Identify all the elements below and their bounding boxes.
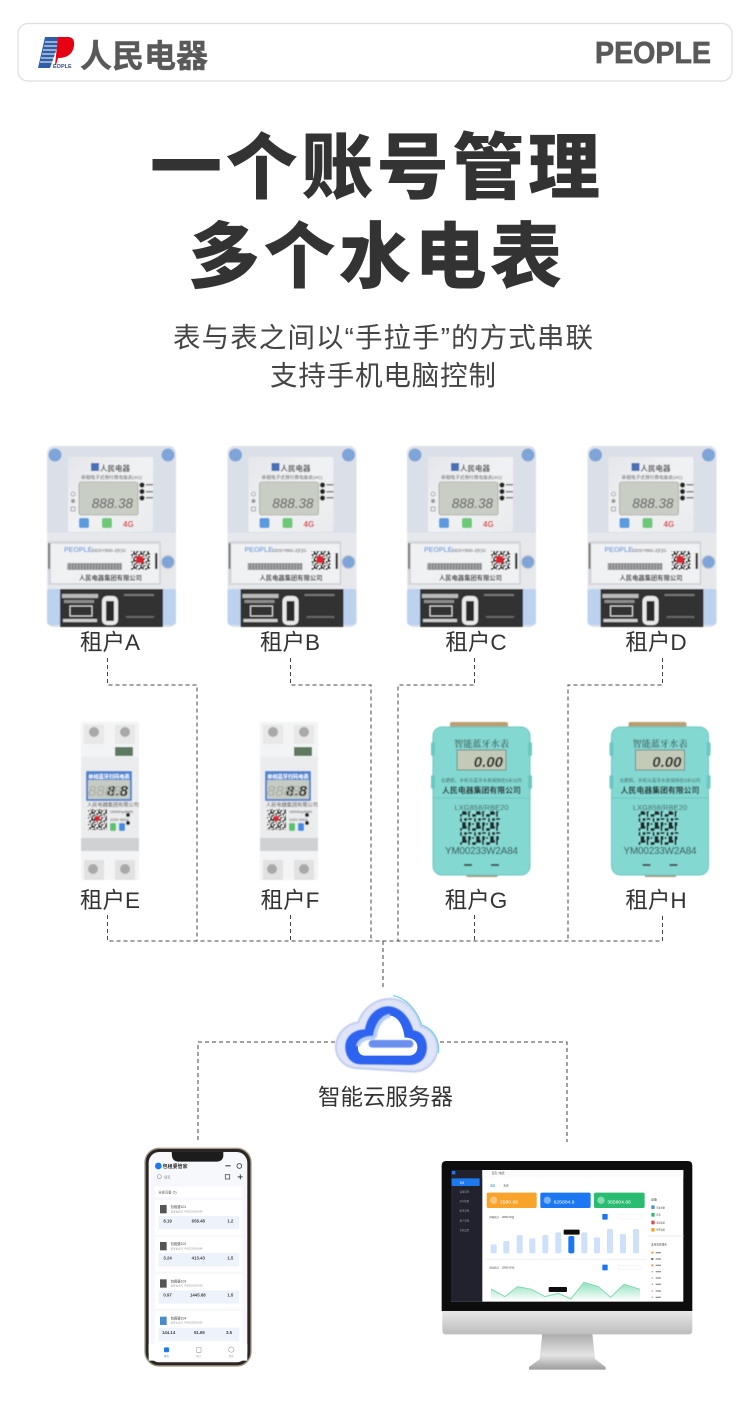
meter: tenant D: PEOPLE (604, 547, 633, 554)
label: tenant F: 租户F (261, 888, 319, 913)
meter: tenant D: 人民电器集团有限公司 (620, 573, 682, 582)
meter: tenant B: 888.38 (272, 496, 314, 511)
water meter: tenant H: 化肥机、手机与蓝牙水表保持在5米以内 (620, 777, 701, 784)
sidebar (451, 1170, 482, 1302)
meter: tenant D (588, 446, 716, 627)
meter: tenant C: PEOPLE (424, 547, 453, 554)
meter: tenant A: 单相电子式预付费电能表(4G) (81, 474, 142, 481)
device card 1: 8.19 (163, 1218, 172, 1223)
din meter: tenant F: 8888 (267, 783, 301, 800)
label: tenant D: 租户D (625, 630, 687, 655)
brand wordmark: PEOPLE (595, 35, 711, 70)
device card 4: 包租婆104 (171, 1315, 186, 1320)
label: tenant E: 租户E (80, 888, 140, 913)
din meter: tenant F: 单相蓝牙扫码电表 (267, 772, 310, 780)
din meter: tenant E: 1600imp/kWh (110, 810, 133, 814)
label: tenant H: 租户H (625, 888, 687, 913)
din meter: tenant F (260, 722, 318, 880)
meter: tenant D: 单相电子式预付费电能表(4G) (622, 474, 683, 481)
legend panel: 预警设备 (656, 1228, 666, 1232)
device card 1: 658.48 (192, 1218, 205, 1223)
bar chart (485, 1214, 647, 1260)
label: tenant G: 租户G (445, 888, 507, 913)
desktop monitor dashboard (442, 1161, 692, 1370)
meter: tenant B: 单相电子式预付费电能表(4G) (262, 474, 323, 481)
subtitle: 支持手机电脑控制 (270, 360, 496, 391)
water meter: tenant G: 0.00 (474, 754, 504, 771)
device card 3: 0.97 (163, 1293, 172, 1298)
icon: People logo (38, 37, 74, 70)
din meter: tenant F: 8.8 (286, 783, 308, 800)
app header (155, 1163, 243, 1197)
device card 4: 3.5 (226, 1330, 233, 1335)
din meter: tenant F: 220V 50Hz (289, 818, 308, 822)
legend panel: 设备 (651, 1196, 657, 1201)
brand name: 人民电器 (80, 38, 208, 74)
legend panel (648, 1196, 683, 1298)
device card 1: 1.2 (227, 1218, 234, 1223)
meter: tenant B: PEOPLE (244, 547, 273, 554)
stat card: blue: 625804.8 (554, 1200, 575, 1206)
legend panel: 在线 (656, 1213, 661, 1217)
meter: tenant A: 人民电器 (100, 463, 130, 473)
stat card: orange (487, 1193, 537, 1208)
meter: tenant B (228, 446, 356, 627)
label: tenant B: 租户B (260, 630, 320, 655)
device card 1: 蓝牙电表号 YM00233W2A84 (171, 1209, 203, 1213)
icon: People logo: EOPLE (53, 64, 72, 70)
water meter: tenant G (431, 722, 532, 877)
water meter: tenant G: 智能蓝牙水表 (454, 738, 509, 749)
bottom tab bar: 我的 (229, 1354, 234, 1358)
subtitle: 表与表之间以“手拉手”的方式串联 (173, 322, 593, 353)
device card 1: 包租婆101 (171, 1204, 186, 1209)
app header: 全部设备 (6) (158, 1189, 177, 1194)
bottom tab bar: 首页 (164, 1354, 169, 1358)
water meter: tenant G: 化肥机、手机与蓝牙水表保持在5米以内 (441, 777, 522, 784)
device card 4: 144.14 (162, 1330, 176, 1335)
desktop monitor dashboard: 首页 / 电表 (492, 1171, 505, 1175)
din meter: tenant E: 人民电器集团有限公司 (87, 800, 139, 808)
sidebar: 首页 (460, 1180, 465, 1184)
meter: tenant A: 4G (123, 520, 134, 529)
sidebar: 系统设置 (460, 1228, 470, 1232)
meter: tenant C: 单相电子式预付费电能表(4G) (441, 474, 502, 481)
stat card: orange: 2580.06 (500, 1200, 518, 1206)
legend panel: 本月充值排名 (651, 1243, 667, 1247)
meter: tenant C: 人民电器集团有限公司 (439, 573, 502, 582)
monitor stand (529, 1333, 606, 1370)
meter: tenant C: 888.38 (452, 496, 493, 511)
device card 4 (155, 1311, 242, 1344)
meter: tenant D: 888.38 (632, 496, 674, 511)
meter: tenant B: 4G (304, 520, 314, 529)
meter: tenant A (47, 446, 176, 627)
meter: tenant D: 4G (664, 520, 674, 529)
water meter: tenant H: 智能蓝牙水表 (632, 738, 688, 749)
stat card: green: 365804.86 (607, 1200, 631, 1206)
sidebar: 账单管理 (460, 1209, 470, 1213)
icon: cloud server (336, 996, 439, 1072)
meter: tenant C: 4G (483, 520, 494, 529)
device card 3: 1.5 (227, 1293, 234, 1298)
water meter: tenant H (610, 722, 710, 877)
desktop monitor dashboard: 水表 (503, 1184, 509, 1188)
meter: tenant C (407, 446, 536, 627)
label: tenant C: 租户C (445, 630, 507, 655)
meter: tenant D: 人民电器 (640, 463, 671, 473)
device card 4: 蓝牙水表号 YM00233W2A84 (171, 1321, 203, 1325)
line chart: 用水统计 · 10890.00吨 (489, 1266, 515, 1270)
desktop monitor dashboard: 电表 (490, 1184, 496, 1188)
stat card: green (594, 1193, 645, 1208)
device card 2: 413.43 (192, 1255, 205, 1260)
meter: tenant A: 人民电器集团有限公司 (79, 573, 142, 582)
device card 4: 51.65 (194, 1330, 205, 1335)
device card 3: 包租婆103 (171, 1278, 186, 1283)
title: 多个水电表 (188, 218, 562, 298)
din meter: tenant F: 人民电器集团有限公司 (266, 800, 318, 808)
device card 1 (155, 1200, 242, 1235)
device card 2: 1.5 (227, 1255, 234, 1260)
din meter: tenant E: 单相蓝牙扫码电表 (88, 772, 131, 780)
water meter: tenant H: 人民电器集团有限公司 (621, 785, 700, 795)
device card 2 (155, 1237, 242, 1272)
label: cloud server: 智能云服务器 (318, 1085, 453, 1110)
din meter: tenant F: 1600imp/kWh (289, 810, 312, 814)
phone app (145, 1148, 251, 1366)
legend panel: 电表总数 (656, 1205, 666, 1209)
water meter: tenant H: 0.00 (652, 754, 682, 771)
device card 2: 包租婆102 (171, 1241, 186, 1246)
connection lines (108, 658, 662, 1142)
din meter: tenant E (81, 722, 139, 880)
din meter: tenant E: 8.8 (107, 783, 129, 800)
sidebar: 租户管理 (460, 1218, 470, 1222)
water meter: tenant H: YM00233W2A84 (624, 846, 697, 857)
bottom tab bar: 统计 (196, 1354, 202, 1358)
sidebar: 设备管理 (460, 1190, 470, 1194)
legend panel: 离线设备 (656, 1220, 666, 1224)
meter: tenant C: 人民电器 (460, 463, 490, 473)
subtitle (173, 322, 593, 391)
meter: tenant B: 人民电器集团有限公司 (260, 573, 322, 582)
din meter: tenant E: 8888 (88, 783, 122, 800)
device card 2: 3.24 (163, 1255, 172, 1260)
device card 2: 蓝牙电表号 YM00233W2A84 (171, 1246, 203, 1250)
sidebar: 房间管理 (460, 1199, 470, 1203)
water meter: tenant G: LXG858/RBE20 (454, 803, 508, 812)
app header: 搜索 (164, 1174, 171, 1179)
water meter: tenant G: 人民电器集团有限公司 (442, 785, 521, 795)
title: 一个账号管理 (150, 129, 600, 209)
din meter: tenant E: 220V 50Hz (110, 818, 129, 822)
meter: tenant A: 888.38 (92, 496, 133, 511)
meter: tenant A: DDSY850-J(E)G (92, 548, 126, 553)
device card 3: 蓝牙电表号 YM00233W2A84 (171, 1284, 203, 1288)
meter: tenant D: DDSY850-J(E)G (632, 548, 667, 553)
water meter: tenant G: YM00233W2A84 (445, 846, 519, 857)
app header: 包租婆管家 (163, 1163, 188, 1170)
stat card: blue (540, 1193, 591, 1208)
bar chart: 用电统计 · 10890.00度 (489, 1215, 515, 1219)
device card 3 (155, 1274, 242, 1309)
meter: tenant B: 人民电器 (280, 463, 311, 473)
meter: tenant C: DDSY850-J(E)G (452, 548, 486, 553)
title (150, 129, 600, 298)
line chart (489, 1265, 641, 1301)
bottom tab bar (149, 1344, 247, 1361)
label: tenant A: 租户A (80, 630, 140, 655)
device card 3: 1445.68 (190, 1293, 206, 1298)
water meter: tenant H: LXG858/RBE20 (633, 803, 687, 812)
meter: tenant A: PEOPLE (64, 547, 93, 554)
meter: tenant B: DDSY850-J(E)G (272, 548, 307, 553)
header bar (18, 24, 732, 81)
